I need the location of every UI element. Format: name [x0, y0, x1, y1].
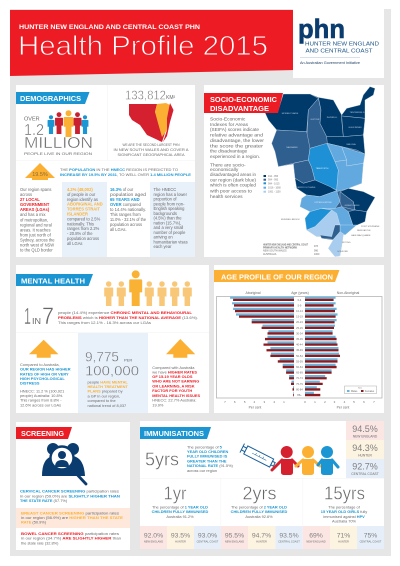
text: LGAs: [20, 187, 55, 253]
map legend: 994 - 1015: [268, 182, 280, 185]
heading: screening: SCREENING: [21, 429, 64, 438]
text: SEIFA explanation: our region (dark blue): [210, 177, 256, 183]
map legend: 1061 - 1100: [268, 191, 281, 194]
chart: age pyramid: 6: [363, 400, 365, 404]
text: breast cancer screening: [16, 508, 130, 528]
text: non-English speaking: number of people: [154, 230, 186, 235]
stat: 1yr: CHILDREN FULLY IMMUNISED: [152, 509, 209, 514]
text: cervical cancer screening: in our region (59.0%) are SLIGHTLY HIGHER THAN: [20, 493, 120, 498]
text: SEIFA explanation: health services: [210, 194, 243, 200]
chart: age pyramid: 3: [334, 400, 336, 404]
banner subtitle: HUNTER NEW ENGLAND AND CENTRAL COAST PHN: [19, 24, 200, 31]
stat: 2yrs: 2yrs: [242, 483, 276, 503]
panel: socio-economic disadvantage: [204, 85, 384, 257]
text: 65 years and over: to 14.4% nationally.: [110, 207, 146, 212]
chart: age pyramid: Per cent: [249, 406, 261, 410]
arrow: 19.5%: [25, 163, 55, 180]
text: 5 year olds: across our region: [187, 468, 217, 473]
map: SEIFA regions: [265, 87, 375, 257]
text: bowel cancer screening: in our region (34.7%) ARE SLIGHTLY HIGHER than: [21, 536, 121, 541]
map labels: TENTERFIELD: [350, 112, 365, 114]
text: psychological distress: RATES OF HIGH OR VERY: [20, 371, 69, 376]
text: LGAs: AREAS (LGAs): [20, 207, 50, 212]
chart: age pyramid: 50-54: [296, 354, 303, 358]
stats: regional breakdown: [140, 526, 384, 549]
text: youth not earning or learning: MENTAL HEALTH ISSUES: [152, 393, 200, 398]
text: Aboriginal population: - 20.8% of the: [67, 231, 93, 236]
map callouts: WYONG: [342, 242, 351, 244]
text: Aboriginal population: ranges from 2.2%: [67, 226, 100, 231]
chart: age pyramid: 20-24: [296, 320, 303, 324]
stats: regional breakdown: 94.7%: [252, 532, 271, 539]
text: SEIFA explanation: economically: [210, 167, 239, 173]
map callouts: MUSWELLBROOK: [281, 219, 300, 221]
text: non-English speaking: [154, 187, 188, 249]
map legend: 1016 - 1060: [268, 187, 281, 190]
text: second largest PHN: SIGNIFICANT GEOGRAPHICAL AREA: [118, 153, 185, 157]
text: 65 years and over: [110, 187, 147, 232]
stats: regional breakdown: 75%: [364, 532, 377, 539]
chart: age pyramid: 4: [253, 400, 255, 404]
chart legend: Males: [351, 390, 358, 393]
text: Aboriginal population: ISLANDER: [67, 212, 88, 216]
map legend: 954 - 993: [268, 179, 279, 182]
panel: demographics: [16, 85, 195, 257]
text: treatment plans: compared to the: [88, 398, 116, 403]
text: population prediction: THE POPULATION IN THE HNECC REGION IS PREDICTED TO: [60, 167, 178, 172]
stats: regional breakdown: CENTRAL COAST: [278, 539, 300, 543]
heading: socio-economic disadvantage: [204, 93, 283, 113]
table: SEIFA averages: NEW SOUTH WALES: [263, 250, 287, 252]
chart: age pyramid: 0-4: [298, 298, 302, 302]
text: LGAs: Our region spans: [20, 187, 51, 192]
stats: 5 year regions: [346, 421, 384, 478]
text: 5 year olds: GREATER THAN THE: [187, 459, 227, 464]
map labels: GLEN INNES: [348, 127, 362, 129]
text: SEIFA explanation: disadvantage, the lower: [210, 138, 264, 144]
chart: age pyramid: 60-64: [296, 365, 303, 369]
chart: age pyramid: 5-9: [298, 303, 302, 307]
heading: socio-economic disadvantage: DISADVANTAGE: [210, 104, 269, 113]
text: 5 year olds: FULLY IMMUNISED IS: [187, 454, 228, 459]
text: SEIFA explanation: experienced in a region.: [210, 154, 260, 160]
text: non-English speaking: humanitarian visas: [154, 239, 188, 244]
text: bowel cancer screening: [21, 531, 121, 545]
icon: syringe: [240, 444, 277, 469]
chart legend: Sex: [358, 387, 363, 389]
text: non-English speaking: (4.5%) than the: [154, 216, 182, 220]
text: LGAs: north west of NSW: [20, 243, 54, 248]
text: SEIFA explanation: There are socio-: [210, 163, 246, 169]
icon: five people: [48, 110, 88, 137]
column backgrounds: [62, 182, 195, 257]
icon: one in seven people: [104, 270, 192, 306]
stat: 2yrs: [231, 483, 288, 519]
stats: 5 year regions: 94.5%: [352, 424, 378, 434]
chart: age pyramid: 5: [353, 400, 355, 404]
text: SEIFA explanation: disadvantaged areas in: [210, 172, 256, 178]
map labels: [282, 112, 365, 207]
heading: age profile: AGE PROFILE OF OUR REGION: [221, 272, 333, 281]
text: Aboriginal population: [67, 187, 103, 246]
stat: area: KM²: [166, 95, 176, 101]
text: psychological distress: This ranges from 8.8% -: [20, 398, 62, 403]
map callouts: [281, 219, 380, 253]
stat: 15yrs: Australia 70%: [332, 518, 357, 524]
heading: immunisations: [140, 427, 211, 439]
header banner: [10, 10, 296, 76]
table: SEIFA averages: [263, 244, 320, 256]
text: Aboriginal population: ABORIGINAL AND: [67, 202, 103, 207]
text: non-English speaking: each year: [154, 244, 172, 249]
chart: age pyramid: 1: [283, 400, 285, 404]
chart: age pyramid: 7: [224, 400, 226, 404]
text: LGAs: across: [20, 192, 32, 197]
text: non-English speaking: The HNECC: [154, 187, 176, 192]
stat: 9,775 per 100,000: 9,775: [85, 349, 119, 365]
stat: area: 133,812: [125, 88, 166, 102]
text: chronic mental problems: [58, 310, 198, 325]
text: Aboriginal population: of people in our: [67, 192, 96, 197]
text: LGAs: 27 LOCAL: [20, 197, 40, 202]
stats: 5 year regions: 94.3%: [352, 443, 378, 453]
stat: population: 1.2: [24, 122, 44, 139]
text: SEIFA explanation: which is often coupled: [210, 183, 256, 189]
map labels: LIVERPOOL PLAINS: [295, 186, 316, 189]
chart: age pyramid: 45-49: [296, 348, 303, 352]
chart: age pyramid: 75-79: [296, 382, 303, 386]
text: chronic mental problems: people (14.4%) experience CHRONIC MENTAL AND BEHAVIOURAL: [58, 310, 193, 315]
heading: immunisations: IMMUNISATIONS: [144, 429, 204, 438]
text: non-English speaking: region has a lower: [154, 192, 188, 197]
arrow: 19.5%: 19.5%: [32, 172, 48, 178]
stat: 2yrs: CHILDREN FULLY IMMUNISED: [231, 509, 288, 514]
chart: age pyramid: 10-14: [296, 309, 303, 313]
text: chronic mental problems: This ranges from 12.1% - 16.3% across our LGAs: [58, 320, 151, 325]
chart: age pyramid: 40-44: [296, 343, 303, 347]
stats: regional breakdown: 71%: [337, 532, 350, 539]
text: Aboriginal population: population across: [67, 236, 99, 241]
stats: regional breakdown: HUNTER: [175, 539, 186, 543]
stat: 15yrs: [321, 483, 367, 524]
text: treatment plans: national trend of 8,037: [88, 403, 126, 408]
stat: 2yrs: Australia 92.6%: [245, 514, 273, 519]
text: non-English speaking: proportion of: [154, 196, 177, 202]
text: LGAs: to the QLD border: [20, 248, 53, 253]
text: 65 years and over: population aged: [110, 192, 147, 197]
chart: age pyramid: 55-59: [296, 359, 303, 363]
heading: demographics: [16, 92, 90, 104]
stats: regional breakdown: HUNTER: [338, 539, 349, 543]
stat: 9,775 per 100,000: 100,000: [85, 363, 139, 379]
stats: 5 year regions: CENTRAL COAST: [351, 472, 379, 476]
chart: age pyramid: 15-19: [296, 315, 303, 319]
stat: 9,775 per 100,000: [85, 349, 139, 379]
chart: age pyramid: 2: [324, 400, 326, 404]
text: youth not earning or learning: Compared with Australia: [152, 365, 195, 370]
text: population prediction: INCREASE BY 19.5% BY 2031 , TO WELL OVER 1.4 MILLION PEOPLE: [60, 172, 191, 177]
map labels: INVERELL: [327, 117, 338, 119]
chart: age pyramid: 2: [273, 400, 275, 404]
stats: regional breakdown: HUNTER: [256, 539, 267, 543]
title: Health Profile 2015: [18, 30, 268, 61]
text: psychological distress: Compared to Australia,: [20, 362, 60, 367]
stat: 9,775 per 100,000: PER: [124, 358, 132, 363]
text: breast cancer screening: in our region (56.9%) are HIGHER THAN THE STATE: [21, 515, 123, 520]
text: SEIFA explanation: with poor access to: [210, 188, 252, 194]
text: second largest PHN: [114, 143, 189, 157]
text: Aboriginal population: 4.2% (48,002): [67, 187, 93, 192]
arrow: youth: [166, 339, 195, 358]
chart: age pyramid: Aboriginal: [245, 291, 261, 295]
text: 5 year olds: YEAR OLD CHILDREN: [187, 449, 228, 454]
text: LGAs: Sydney, across the: [20, 238, 55, 242]
text: youth not earning or learning: FACTOR FOR YOUTH: [152, 388, 192, 393]
text: 65 years and over: all LGAs.: [110, 227, 127, 232]
text: population prediction: [60, 167, 191, 177]
text: SEIFA explanation: [210, 117, 264, 200]
text: chronic mental problems: PROBLEMS which is HIGHER THAN THE NATIONAL AVERAGE (13.6%).: [58, 315, 198, 320]
stats: regional breakdown: NEW ENGLAND: [306, 539, 326, 543]
table: SEIFA averages: PRIMARY HEALTH NETWORK: [263, 247, 297, 250]
chart: age pyramid: 65-69: [296, 371, 303, 375]
text: SEIFA explanation: Socio-Economic: [210, 117, 246, 123]
text: 65 years and over: 16.3% of our: [110, 187, 134, 192]
stat: population: OVER: [24, 116, 40, 122]
map: NSW: [129, 103, 174, 142]
chart: age pyramid: 6: [234, 400, 236, 404]
map labels: MOREE PLAINS: [282, 112, 299, 115]
map callouts: LAKE MACQUARIE: [351, 234, 371, 237]
stat: 1yr: 1yr: [164, 483, 186, 503]
chart legend: [344, 386, 376, 394]
stats: regional breakdown: 69%: [309, 532, 323, 539]
map legend: [264, 175, 281, 194]
text: psychological distress: OUR REGION HAS HIGHER: [20, 367, 71, 372]
text: Aboriginal population: nationally. This: [67, 221, 94, 226]
text: 65 years and over: population across: [110, 222, 142, 227]
table: SEIFA averages: AUSTRALIA: [263, 253, 277, 256]
stat: 15yrs: immunised against HPV: [323, 514, 365, 519]
text: LGAs: areas. It reaches: [20, 227, 50, 232]
text: LGAs: and has a mix: [20, 212, 46, 217]
text: cervical cancer screening: THE STATE RATE (57.7%): [20, 498, 68, 503]
stat: 1yr: [152, 483, 209, 519]
stat: 2yrs: The percentage of 2 YEAR OLD: [231, 504, 287, 509]
stat: 1 in 7: 1: [24, 303, 31, 329]
table: SEIFA averages: 1000: [314, 253, 320, 256]
text: SEIFA explanation: the disadvantage: [210, 149, 248, 155]
text: Aboriginal population: compared to 2.5%: [67, 216, 101, 221]
text: treatment plans: PLANS prepared by: [88, 389, 123, 394]
text: SEIFA explanation: relative advantage and: [210, 133, 263, 139]
logo: phn: HUNTER NEW ENGLAND: [305, 42, 379, 48]
text: youth not earning or learning: we have HIGHER RATES: [152, 369, 197, 374]
logo: phn: phn: [298, 14, 345, 44]
text: breast cancer screening: RATE (50.9%): [21, 520, 47, 525]
chart: age pyramid: 1: [314, 400, 316, 404]
map labels: NARRABRI: [286, 146, 298, 149]
logo: phn: [293, 0, 384, 78]
text: Aboriginal population: region identify as: [67, 197, 98, 202]
map callouts: NEWCASTLE: [357, 229, 371, 232]
panel: immunisations: [140, 421, 384, 549]
stat: 1yr: Australia 91.2%: [166, 514, 194, 519]
text: second largest PHN: IN NEW SOUTH WALES AND COVER A: [114, 148, 189, 152]
text: cervical cancer screening: [20, 489, 120, 503]
chart: age pyramid: Non-Aboriginal: [337, 291, 359, 295]
map legend: 914 - 953: [268, 175, 279, 178]
heading: demographics: DEMOGRAPHICS: [20, 94, 81, 103]
text: 65 years and over: 65 YEARS AND: [110, 197, 140, 202]
stat: 5yrs: 5yrs: [145, 450, 179, 470]
stats: 5 year regions: HUNTER: [358, 454, 372, 458]
text: youth not earning or learning: [152, 365, 200, 407]
chart: age pyramid: 85+: [297, 393, 302, 397]
text: 65 years and over: OVER compared: [110, 202, 142, 207]
table: SEIFA averages: 996: [314, 250, 319, 252]
text: SEIFA explanation: Indexes for Areas: [210, 122, 249, 128]
chart: age pyramid: 7: [373, 400, 375, 404]
map labels: WALCHA: [346, 143, 356, 146]
text: psychological distress: HIGH PSYCHOLOGICAL: [20, 376, 65, 381]
text: 65 years and over: This ranges from: [110, 212, 141, 217]
chart: age pyramid: 70-74: [296, 376, 303, 380]
text: treatment plans: people HAVE MENTAL: [88, 379, 128, 384]
stat: 15yrs: 15 YEAR OLD GIRLS fully: [321, 509, 367, 514]
text: LGAs: from just north of: [20, 232, 52, 238]
stats: regional breakdown: NEW ENGLAND: [225, 539, 244, 543]
heading: mental health: MENTAL HEALTH: [21, 276, 85, 286]
text: non-English speaking: arriving on: [154, 234, 173, 240]
text: youth not earning or learning: 19.9%: [152, 402, 164, 407]
stats: regional breakdown: 92.0%: [144, 532, 163, 539]
chart: age pyramid: 5: [244, 400, 246, 404]
text: youth not earning or learning: OF 15-19 YEAR OLDS: [152, 374, 193, 379]
stat: population: [24, 116, 93, 156]
text: youth not earning or learning: OR LEARNING, A RISK: [152, 383, 195, 388]
text: Aboriginal population: all LGAs: [67, 241, 82, 246]
map labels: TAMWORTH: [316, 167, 329, 170]
text: LGAs: GOVERNMENT: [20, 202, 50, 207]
text: treatment plans: HEALTH TREATMENT: [88, 384, 128, 389]
stats: regional breakdown: NEW ENGLAND: [144, 539, 163, 543]
chart: age pyramid: 3: [263, 400, 265, 404]
table: SEIFA averages: HUNTER NEW ENGLAND AND CENTRAL COAST: [263, 244, 308, 246]
text: cervical cancer screening: CERVICAL CANCER SCREENING participation rates: [20, 489, 119, 494]
chart: age pyramid: 80-84: [296, 387, 303, 391]
chart: age pyramid: 35-39: [296, 337, 303, 341]
map labels: GREAT LAKES: [344, 204, 360, 207]
stat: population: PEOPLE LIVE IN OUR REGION: [24, 151, 92, 156]
text: non-English speaking: nation (15.7%),: [154, 220, 181, 225]
chart: age pyramid: Age (years): [291, 291, 309, 295]
icon: people and magnifier: [42, 443, 86, 484]
chart: age pyramid: 30-34: [296, 331, 303, 335]
map callouts: PORT STEPHENS: [361, 226, 380, 228]
stats: regional breakdown: 93.5%: [171, 532, 190, 539]
stats: regional breakdown: 95.5%: [225, 532, 244, 539]
arrow: psychological distress: [29, 340, 58, 358]
text: bowel cancer screening: the state rate (32.8%): [21, 540, 59, 545]
text: second largest PHN: WE ARE THE SECOND LARGEST PHN: [122, 143, 180, 147]
text: SEIFA explanation: the score the greater: [210, 143, 263, 149]
map labels: GWYDIR: [310, 119, 320, 121]
text: psychological distress: 12.6% across our LGAs: [20, 402, 61, 407]
panel: age profile: [214, 265, 384, 413]
panel: screening: [16, 422, 130, 550]
map callouts: GOSFORD: [337, 251, 348, 253]
text: 5 year olds: [187, 444, 234, 473]
text: psychological distress: people) Australia: 10.8%.: [20, 393, 63, 398]
stats: regional breakdown: CENTRAL COAST: [197, 539, 219, 543]
text: non-English speaking: and a very small: [154, 225, 183, 230]
text: Aboriginal population: TORRES STRAIT: [67, 207, 100, 212]
stats: 5 year regions: 92.7%: [352, 461, 378, 471]
stat: 1 in 7: IN: [32, 317, 41, 326]
stats: regional breakdown: 93.5%: [279, 532, 299, 539]
text: youth not earning or learning: WHO ARE NOT EARNING: [152, 379, 199, 384]
chart legend: Females: [365, 390, 375, 393]
text: bowel cancer screening: BOWEL CANCER SCREENING participation rates: [21, 531, 119, 536]
stat: 1 in 7: 7: [42, 303, 54, 330]
heading: mental health: [16, 274, 93, 286]
map labels: UPPER HUNTER: [314, 202, 332, 204]
chart: age pyramid: 0: [304, 400, 306, 404]
stat: 1 in 7: [24, 303, 54, 330]
text: psychological distress: HNECC: 11.2 % (100,921: [20, 388, 64, 393]
text: psychological distress: DISTRESS: [20, 381, 40, 386]
text: 5 year olds: The percentage of 5: [187, 444, 223, 449]
stats: 5 year regions: NEW ENGLAND: [353, 435, 378, 439]
table: SEIFA averages: 973: [314, 245, 319, 248]
stats: regional breakdown: 93.0%: [198, 532, 217, 539]
text: LGAs: of metropolitan,: [20, 217, 48, 222]
text: LGAs: regional and rural: [20, 222, 52, 227]
stats: regional breakdown: CENTRAL COAST: [360, 539, 382, 543]
text: treatment plans: [88, 379, 128, 408]
heading: age profile: [214, 270, 340, 282]
text: psychological distress: [20, 362, 71, 407]
text: treatment plans: a GP in our region,: [88, 393, 120, 398]
chart: age pyramid: 25-29: [296, 326, 303, 330]
text: non-English speaking: English speaking: [154, 206, 185, 211]
logo: phn: AND CENTRAL COAST: [306, 48, 373, 54]
text: 65 years and over: 11.0% - 32.1% of the: [110, 217, 147, 222]
icon: three children holding hands: [272, 446, 338, 475]
panel: mental health: [16, 265, 209, 413]
text: breast cancer screening: BREAST CANCER SCREENING participation rates: [21, 510, 119, 515]
text: youth not earning or learning: HNECC: 22.7% Australia:: [152, 398, 196, 403]
chart: age pyramid: 4: [344, 400, 346, 404]
chart: age pyramid: Per cent: [337, 406, 349, 410]
heading: socio-economic disadvantage: SOCIO-ECONOMIC: [210, 95, 278, 104]
stat: population: MILLION: [24, 135, 93, 152]
text: SEIFA explanation: (SEIFA) scores indicate: [210, 127, 259, 133]
text: non-English speaking: backgrounds: [154, 211, 177, 216]
text: 5 year olds: NATIONAL RATE (91.5%): [187, 463, 234, 468]
stat: 15yrs: 15yrs: [324, 483, 365, 503]
chart: age pyramid: [216, 291, 382, 410]
logo: phn: An Australian Government Initiative: [300, 61, 360, 65]
stat: 1yr: The percentage of 1 YEAR OLD: [152, 504, 208, 509]
stat: 15yrs: The percentage of: [328, 504, 361, 509]
text: non-English speaking: people from non-: [154, 201, 185, 206]
